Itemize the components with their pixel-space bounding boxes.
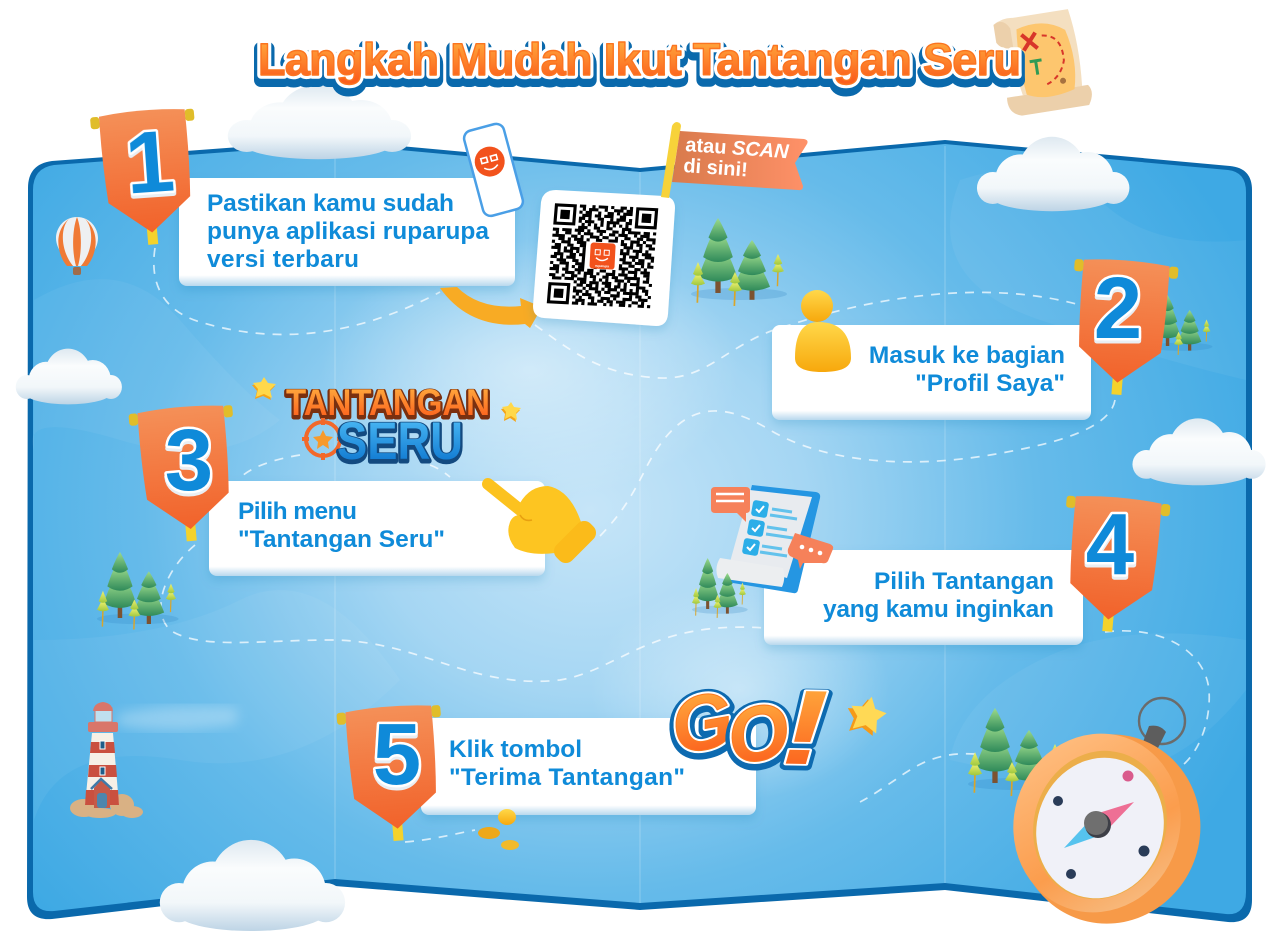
text: step 2: "Profil Saya" <box>915 370 1065 397</box>
flag: atau SCAN di sini <box>661 122 808 198</box>
QR card <box>533 190 675 326</box>
icon: profile person <box>795 290 851 372</box>
dashed route <box>154 248 1209 842</box>
compass face <box>1018 741 1182 915</box>
badge: GO! <box>664 668 830 789</box>
flag: atau SCAN di sini: di sini! <box>683 155 748 181</box>
icon: phone with app logo <box>462 122 525 218</box>
tower <box>85 733 119 805</box>
card 5 <box>421 718 756 815</box>
text: step 3: Pilih menu <box>238 498 357 525</box>
card 2 <box>772 325 1091 420</box>
icon: lighthouse <box>70 702 237 818</box>
text: step 5 <box>449 736 685 791</box>
badge: GO!: G <box>664 674 739 771</box>
badge: GO!: O <box>722 685 794 781</box>
card 4 <box>764 550 1083 645</box>
compass needle <box>1064 802 1134 848</box>
badge: GO!: G <box>664 674 739 771</box>
number 5: 5 <box>373 706 421 803</box>
text: step 1: punya aplikasi ruparupa <box>207 218 489 245</box>
QR logo <box>589 242 616 270</box>
compass dots <box>1053 770 1150 879</box>
step 3 <box>128 402 545 576</box>
text: step 5: Klik tombol <box>449 736 582 763</box>
text: step 4: Pilih Tantangan <box>874 568 1054 595</box>
trees: by banner 2 <box>1150 295 1212 355</box>
logo: Tantangan Seru: SERU <box>337 414 463 473</box>
star <box>252 377 276 400</box>
text: step 3: "Tantangan Seru" <box>238 526 445 553</box>
text: step 1: versi terbaru <box>207 246 359 273</box>
icon: hot air balloon <box>56 217 98 275</box>
text: step 4: yang kamu inginkan <box>823 596 1054 623</box>
badge: GO!: O <box>722 685 794 781</box>
cloud: bottom <box>160 840 345 931</box>
banner 4 <box>1055 493 1171 636</box>
banner 2 <box>1065 256 1179 399</box>
panel: folded map <box>27 140 1252 922</box>
text: step 5: "Terima Tantangan" <box>449 764 685 791</box>
logo: Tantangan Seru: TANTANGAN <box>286 382 490 423</box>
logo: Tantangan Seru <box>286 382 490 473</box>
text: step 1: Pastikan kamu sudah <box>207 190 454 217</box>
cloud: top left <box>228 85 411 159</box>
QR logo: ruparupa <box>595 264 609 268</box>
target icon <box>302 418 344 460</box>
badge: GO!: ! <box>780 668 830 787</box>
star <box>501 402 521 422</box>
badge: GO!: ! <box>780 668 830 787</box>
card 3 <box>209 481 545 576</box>
number 1: 1 <box>122 112 177 213</box>
compass ring and stem <box>1139 698 1185 748</box>
text: step 2: Masuk ke bagian <box>869 342 1065 369</box>
badge: GO!: ! <box>780 670 830 789</box>
light beam <box>117 706 237 730</box>
rocks <box>70 794 143 818</box>
trees: by checklist <box>692 558 748 618</box>
icon: coins <box>478 809 519 850</box>
cloud: top right <box>977 137 1129 211</box>
badge: GO!: O <box>722 687 794 783</box>
step 5 <box>336 702 756 845</box>
step 4 <box>764 493 1171 645</box>
logo: Tantangan Seru: SERU <box>337 412 463 471</box>
badge: GO!: G <box>665 676 740 773</box>
cloud: left <box>16 349 122 404</box>
logo: Tantangan Seru: TANTANGAN <box>286 384 490 425</box>
banner 5 <box>336 702 450 845</box>
text: step 4 <box>823 568 1054 623</box>
banner 1 <box>90 106 205 249</box>
step 2 <box>772 256 1179 420</box>
number 2: 2 <box>1094 260 1142 357</box>
arrow to QR <box>440 287 542 328</box>
icon: checklist document <box>711 485 833 593</box>
title: Langkah Mudah Ikut Tantangan Seru <box>258 34 1021 85</box>
banner 3 <box>128 402 244 546</box>
QR code <box>547 203 658 308</box>
number 3: 3 <box>165 412 213 509</box>
text: step 1 <box>207 190 489 273</box>
compass body <box>993 711 1225 947</box>
text: step 2 <box>869 342 1065 397</box>
title: Langkah Mudah Ikut Tantangan Seru <box>258 39 1021 90</box>
icon: pointing hand <box>488 484 600 567</box>
title: Langkah Mudah Ikut Tantangan Seru <box>258 34 1021 85</box>
cloud: right <box>1132 418 1266 485</box>
trees: top centre <box>691 218 787 306</box>
icon: treasure map scroll <box>993 7 1094 118</box>
text: step 3 <box>238 498 445 553</box>
number 4: 4 <box>1086 496 1134 593</box>
star <box>843 692 889 738</box>
trees: bottom right <box>968 708 1064 796</box>
card 1 <box>179 178 515 286</box>
house door <box>94 780 110 808</box>
trees: left <box>97 552 179 629</box>
icon: compass <box>990 698 1225 947</box>
step 1 <box>90 106 515 286</box>
flag: atau SCAN di sini: atau SCAN <box>685 134 790 163</box>
